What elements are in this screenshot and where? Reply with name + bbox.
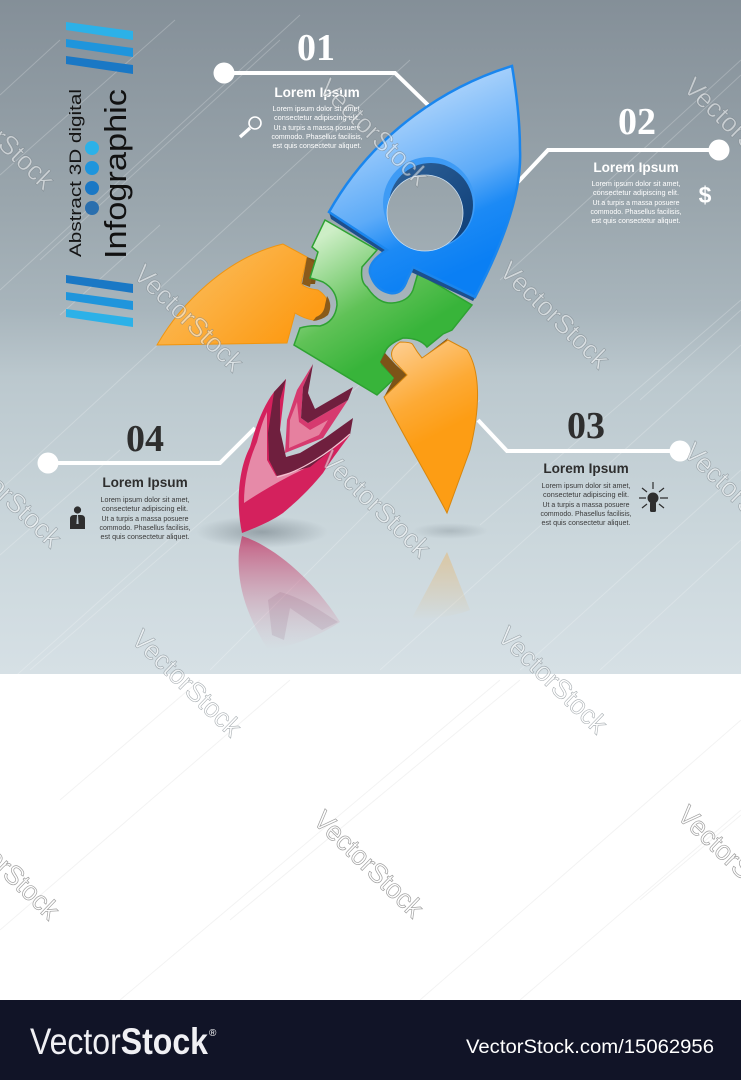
callout 03: Lorem ipsum dolor sit amet, (542, 481, 630, 490)
callout 03 (478, 405, 690, 527)
flame (239, 364, 353, 533)
rocket illustration (157, 66, 520, 533)
reflection: fin (412, 552, 470, 619)
callout 01: commodo. Phasellus facilisis, (272, 132, 362, 141)
icon: magnifier (240, 117, 261, 137)
header stripes bottom (66, 275, 133, 327)
callout 04: Lorem Ipsum (102, 475, 188, 490)
watermarks on gray panel: VectorStock (315, 445, 437, 564)
callout 04: Ut a turpis a massa posuere (102, 514, 188, 523)
callout 02: Lorem ipsum dolor sit amet, (592, 179, 680, 188)
callout 03: est quis consectetur aliquet. (542, 518, 630, 527)
floor shadows (196, 516, 488, 548)
watermarks on gray panel (0, 72, 741, 743)
footer id: VectorStock.com/15062956 (466, 1036, 714, 1058)
callout 01: 01 (297, 27, 335, 69)
callout 02: consectetur adipiscing elit. (593, 188, 679, 197)
heading: Abstract 3D digital: Abstract 3D digital (66, 89, 85, 257)
piece: right fin (380, 338, 478, 513)
icon: dollar: $ (699, 182, 712, 208)
porthole (383, 157, 475, 251)
callout 04: consectetur adipiscing elit. (102, 504, 188, 513)
footer logo: VectorStock (30, 1021, 208, 1062)
watermarks on white panel: VectorStock (308, 805, 430, 924)
callout 01: Lorem ipsum dolor sit amet, (272, 104, 362, 113)
callout 04: est quis consectetur aliquet. (100, 532, 190, 541)
callout 01: Ut a turpis a massa posuere (274, 123, 360, 132)
callout 01: est quis consectetur aliquet. (272, 141, 362, 150)
callout 02 (518, 101, 730, 225)
footer registered mark: ® (209, 1028, 217, 1039)
reflection: flame (239, 536, 340, 650)
gray backdrop panel (0, 0, 741, 674)
callout 01: consectetur adipiscing elit. (274, 113, 360, 122)
watermarks on gray panel: VectorStock (313, 73, 435, 192)
watermarks on gray panel: VectorStock (128, 259, 250, 378)
callout 03: Ut a turpis a massa posuere (542, 500, 630, 509)
callout 03: 03 (567, 405, 605, 447)
header dots (85, 141, 99, 215)
callout 02: Ut a turpis a massa posuere (592, 198, 680, 207)
callout 01 (214, 27, 428, 150)
watermarks on gray panel: VectorStock (494, 256, 616, 375)
callout 02: 02 (618, 101, 656, 143)
icon: light bulb (639, 482, 668, 512)
footer bar (0, 1000, 741, 1080)
callout 03: commodo. Phasellus facilisis, (540, 509, 632, 518)
icon: person (70, 506, 85, 529)
watermarks on gray panel: VectorStock (126, 624, 248, 743)
piece: left fin (157, 244, 330, 345)
callout 04: commodo. Phasellus facilisis, (100, 523, 190, 532)
callout 03: consectetur adipiscing elit. (543, 490, 629, 499)
heading: Infographic: Infographic (98, 89, 133, 259)
callout 03: Lorem Ipsum (543, 461, 629, 476)
watermarks on white panel (0, 800, 741, 926)
piece: blue nose (329, 66, 520, 301)
piece: green body (294, 220, 472, 395)
callout 01: Lorem Ipsum (274, 85, 360, 100)
callout 04 (38, 418, 255, 541)
watermarks on gray panel: VectorStock (492, 621, 614, 740)
callout 04: Lorem ipsum dolor sit amet, (100, 495, 190, 504)
callout 02: est quis consectetur aliquet. (592, 216, 680, 225)
callout 04: 04 (126, 418, 164, 460)
callout 02: commodo. Phasellus facilisis, (590, 207, 682, 216)
header stripes top (66, 22, 133, 74)
callout 02: Lorem Ipsum (593, 160, 679, 175)
